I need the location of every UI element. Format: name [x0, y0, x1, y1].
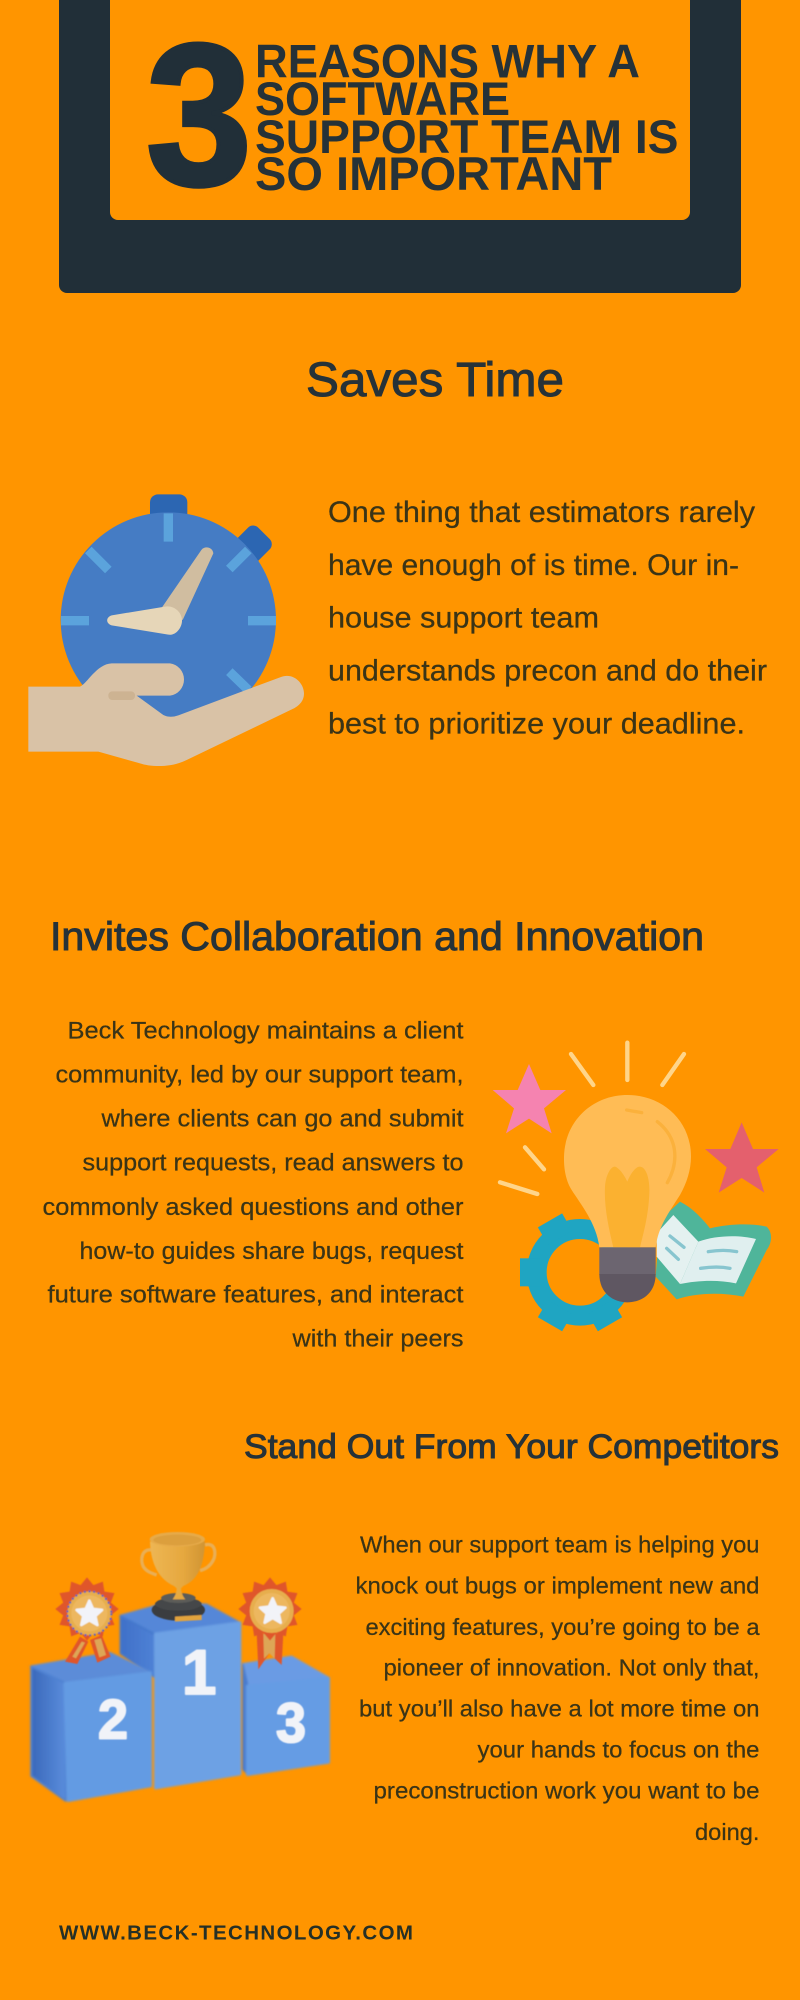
medal right — [238, 1577, 302, 1669]
text block: collaboration: how-to guides share bugs, request — [80, 1238, 464, 1265]
title text: SUPPORT TEAM IS — [255, 111, 678, 164]
text block: stand out: doing. — [695, 1819, 760, 1845]
podium block 3 — [243, 1657, 329, 1775]
title text: REASONS WHY A — [255, 36, 640, 88]
heading: stand out from your competitors: Stand Out From Your Competitors — [244, 1428, 779, 1466]
text block: collaboration: Beck Technology maintains a client — [68, 1018, 464, 1044]
text block: saves time: understands precon and do their — [328, 654, 767, 688]
text block: stand out: exciting features, you’re going to be a — [366, 1614, 760, 1640]
text block: collaboration: future software features, and interact — [48, 1282, 464, 1308]
text block: stand out: knock out bugs or implement new and — [356, 1572, 760, 1598]
text block: stand out: your hands to focus on the — [478, 1736, 760, 1762]
medal left — [55, 1577, 119, 1664]
text block: saves time: have enough of is time. Our in- — [328, 549, 739, 582]
title text — [255, 36, 678, 201]
dark frame — [59, 0, 741, 293]
text block: saves time: One thing that estimators rarely — [328, 496, 755, 529]
icon: light bulb with gear, book and stars — [493, 1043, 779, 1331]
heading: saves time: Saves Time — [306, 354, 564, 407]
text block: collaboration: where clients can go and submit — [100, 1106, 464, 1132]
text block: stand out — [356, 1532, 760, 1845]
podium block 2 — [31, 1653, 151, 1801]
icon: podium with trophy and medals — [31, 1532, 329, 1801]
podium numerals: 2 — [98, 1688, 128, 1751]
title text: SO IMPORTANT — [255, 148, 612, 201]
text block: saves time: best to prioritize your deadline. — [328, 708, 745, 740]
podium numerals: 1 — [182, 1638, 216, 1708]
heading: invites collaboration and innovation: Invites Collaboration and Innovation — [50, 915, 704, 959]
text block: saves time — [328, 496, 767, 740]
podium block 1 — [121, 1603, 240, 1788]
text block: stand out: pioneer of innovation. Not only that, — [384, 1654, 760, 1680]
trophy — [142, 1532, 215, 1622]
orange title panel — [110, 0, 690, 220]
text block: collaboration — [42, 1018, 464, 1352]
text block: saves time: house support team — [328, 602, 599, 634]
text block: stand out: When our support team is helping you — [360, 1532, 760, 1558]
text block: collaboration: community, led by our support team, — [56, 1062, 464, 1088]
text block: stand out: but you’ll also have a lot more time on — [359, 1696, 760, 1722]
podium numerals: 3 — [276, 1691, 306, 1754]
text block: stand out: preconstruction work you want to be — [374, 1778, 760, 1804]
text block: collaboration: with their peers — [291, 1326, 464, 1352]
title text: SOFTWARE — [255, 73, 510, 126]
text block: collaboration: support requests, read answers to — [82, 1150, 464, 1176]
text block: collaboration: commonly asked questions and other — [42, 1194, 464, 1221]
footer url: WWW.BECK-TECHNOLOGY.COM — [59, 1922, 413, 1944]
big number 3: 3 — [146, 2, 252, 228]
podium numerals — [98, 1638, 306, 1754]
icon: stopwatch on hand — [28, 494, 304, 766]
title banner — [59, 0, 741, 293]
